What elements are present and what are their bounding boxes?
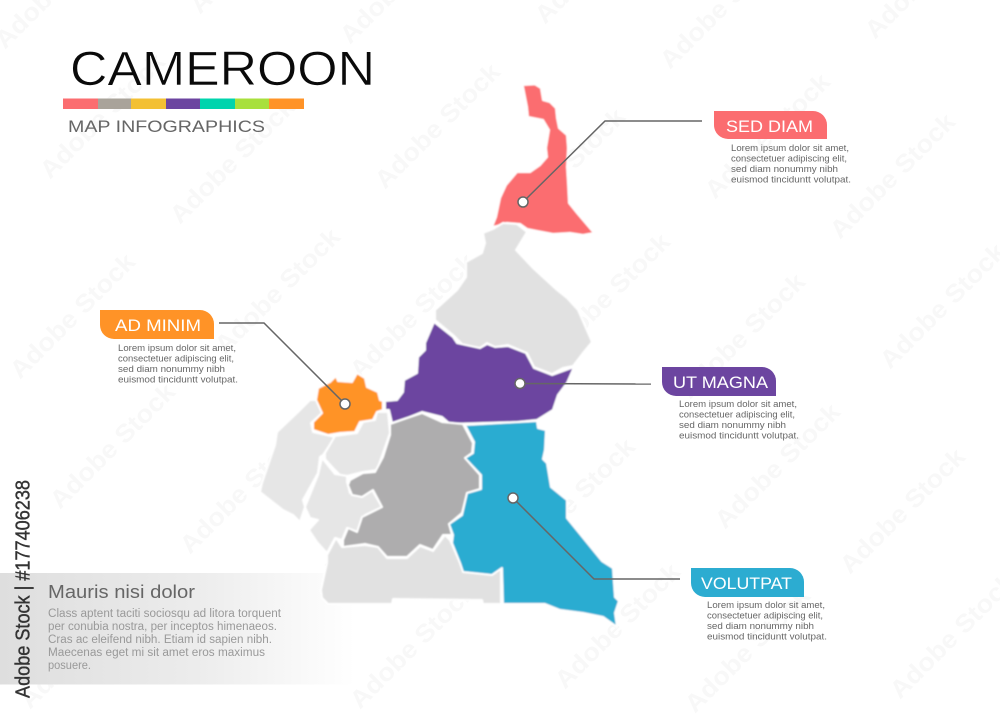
subtitle: MAP INFOGRAPHICS bbox=[68, 118, 265, 136]
marker bbox=[340, 399, 350, 409]
watermark pattern: Adobe Stock bbox=[874, 238, 1000, 374]
watermark pattern: Adobe Stock bbox=[494, 103, 631, 239]
description: Lorem ipsum dolor sit amet, bbox=[118, 342, 236, 353]
panel body text: posuere. bbox=[48, 660, 91, 672]
leader line bbox=[523, 121, 702, 202]
watermark pattern: Adobe Stock bbox=[344, 578, 481, 714]
watermark pattern: Adobe Stock bbox=[369, 58, 506, 194]
watermark pattern: Adobe Stock bbox=[504, 433, 641, 569]
label pill bbox=[691, 568, 804, 597]
watermark pattern: Adobe Stock bbox=[4, 248, 141, 384]
watermark pattern: Adobe Stock bbox=[539, 228, 676, 364]
description: consectetuer adipiscing elit, bbox=[118, 352, 234, 364]
region: west bbox=[325, 412, 390, 476]
description: euismod tinciduntt volutpat. bbox=[707, 630, 827, 642]
panel body text: Cras ac eleifend nibh. Etiam id sapien nibh. bbox=[48, 634, 272, 646]
region: north bbox=[435, 223, 592, 374]
watermark pattern: Adobe Stock bbox=[34, 48, 171, 184]
region: north-west bbox=[313, 373, 383, 435]
watermark pattern: Adobe Stock bbox=[824, 108, 961, 244]
description: sed diam nonummy nibh bbox=[679, 419, 786, 430]
description: sed diam nonummy nibh bbox=[118, 363, 225, 374]
panel: text block background bbox=[0, 573, 355, 684]
label pill bbox=[100, 310, 214, 339]
description: euismod tinciduntt volutpat. bbox=[679, 430, 799, 440]
description: Lorem ipsum dolor sit amet, bbox=[707, 599, 825, 610]
description: Lorem ipsum dolor sit amet, bbox=[731, 142, 849, 153]
label text: AD MINIM bbox=[115, 317, 201, 335]
label text: SED DIAM bbox=[726, 118, 813, 136]
watermark pattern: Adobe Stock bbox=[44, 378, 181, 514]
leader line bbox=[219, 323, 345, 404]
description: sed diam nonummy nibh bbox=[707, 620, 814, 631]
panel body text: per conubia nostra, per inceptos himenaeos. bbox=[48, 621, 277, 633]
watermark pattern: Adobe Stock bbox=[344, 248, 481, 384]
watermark pattern: Adobe Stock bbox=[164, 93, 301, 229]
watermark pattern: Adobe Stock bbox=[834, 443, 971, 579]
watermark pattern: Adobe Stock bbox=[709, 398, 846, 534]
description: euismod tinciduntt volutpat. bbox=[731, 174, 851, 184]
region: littoral bbox=[305, 458, 382, 553]
description: euismod tinciduntt volutpat. bbox=[118, 374, 238, 384]
description: sed diam nonummy nibh bbox=[731, 163, 838, 174]
title: CAMEROON bbox=[70, 43, 375, 96]
marker bbox=[508, 493, 518, 503]
callout: sed diam bbox=[518, 111, 851, 207]
description: Lorem ipsum dolor sit amet, bbox=[679, 398, 797, 409]
watermark pattern: Adobe Stock bbox=[209, 223, 346, 359]
watermark pattern: Adobe Stock bbox=[14, 578, 151, 714]
colour bar bbox=[63, 98, 304, 109]
region: adamawa bbox=[385, 322, 574, 424]
description: consectetuer adipiscing elit, bbox=[679, 408, 795, 420]
stock credit: Adobe Stock | #177406238 bbox=[12, 480, 34, 698]
watermark pattern: Adobe Stock bbox=[674, 268, 811, 404]
panel body text: Class aptent taciti sociosqu ad litora torquent bbox=[48, 608, 282, 620]
callout: ad minim bbox=[100, 310, 350, 409]
region: south bbox=[321, 535, 501, 604]
region: east bbox=[449, 421, 619, 627]
watermark pattern: Adobe Stock bbox=[379, 388, 516, 524]
description: consectetuer adipiscing elit, bbox=[731, 152, 847, 164]
region: west coast bbox=[260, 400, 335, 522]
description: consectetuer adipiscing elit, bbox=[707, 610, 823, 620]
panel body text: Maecenas eget mi sit amet eros maximus bbox=[48, 647, 265, 659]
watermark pattern: Adobe Stock bbox=[549, 558, 686, 694]
watermark pattern: Adobe Stock bbox=[174, 423, 311, 559]
map of Cameroon bbox=[260, 84, 619, 627]
callout: volutpat bbox=[508, 493, 827, 642]
marker bbox=[515, 378, 525, 388]
leader line bbox=[513, 498, 680, 579]
marker bbox=[518, 197, 528, 207]
region: far north bbox=[492, 84, 594, 235]
panel heading: Mauris nisi dolor bbox=[48, 582, 195, 602]
label text: VOLUTPAT bbox=[701, 575, 792, 593]
label pill bbox=[662, 367, 776, 396]
leader line bbox=[520, 382, 651, 385]
label text: UT MAGNA bbox=[673, 374, 768, 392]
callout: ut magna bbox=[515, 367, 799, 440]
label pill bbox=[714, 111, 827, 139]
region: centre bbox=[343, 413, 480, 557]
watermark pattern: Adobe Stock bbox=[214, 553, 351, 689]
watermark pattern: Adobe Stock bbox=[699, 68, 836, 204]
